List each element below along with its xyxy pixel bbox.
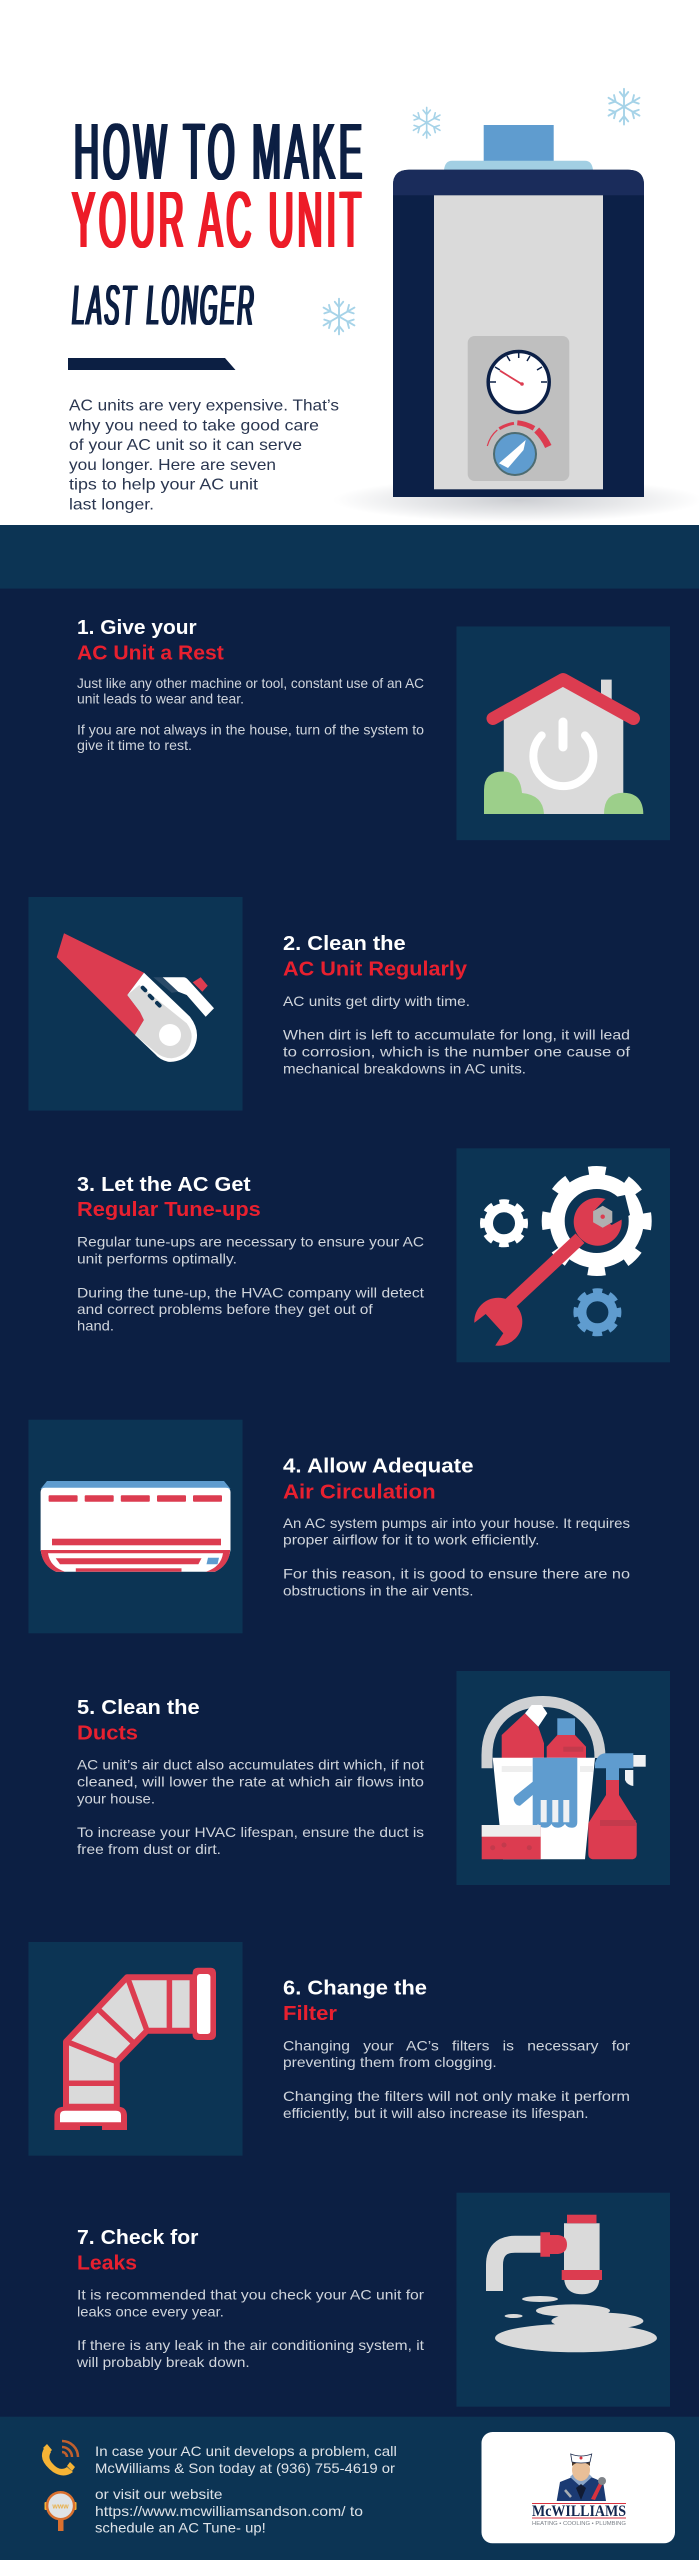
body: tip 7: It is recommended that you check your AC unit for [77,2286,424,2302]
intro paragraph: tips to help your AC unit [69,476,259,494]
icon panel: leaking pipe [456,2193,670,2407]
body: tip 6: Changing your AC’s filters is necessary for [283,2037,630,2053]
illustration: ac furnace unit [333,125,699,522]
heading: tip 3: Regular Tune-ups [77,1199,261,1221]
text: website message: schedule an AC Tune- up! [95,2520,266,2536]
panel: tip 3 text [77,1174,424,1334]
intro paragraph: why you need to take good care [68,417,319,434]
top band [0,525,699,589]
body: tip 6: Changing the filters will not only make it perform [283,2088,630,2104]
icon: phone [42,2441,78,2476]
logo card [482,2432,675,2543]
panel: tip 7 text [76,2227,424,2370]
heading: tip 7 [77,2227,199,2274]
icon: website magnifier [44,2492,76,2531]
heading: tip 4 [283,1456,474,1503]
body: tip 7: will probably break down. [76,2354,250,2370]
intro paragraph: of your AC unit so it can serve [69,437,302,454]
heading: tip 2: AC Unit Regularly [283,958,468,980]
heading: tip 4: 4. Allow Adequate [283,1456,474,1478]
intro paragraph: last longer. [69,496,154,513]
icon panel: cleaning supplies [456,1671,670,1885]
heading: tip 4: Air Circulation [283,1481,436,1503]
body: tip 3: and correct problems before they get out of [77,1301,373,1317]
body: tip 2: to corrosion, which is the number one cause of [283,1044,630,1060]
body: tip 6: efficiently, but it will also increase its lifespan. [283,2105,588,2121]
body: tip 5: free from dust or dirt. [77,1841,221,1857]
body: tip 1: Just like any other machine or tool, constant use of an AC [77,675,424,691]
icon panel: duct elbow [28,1942,242,2156]
icon: snowflake right [609,89,639,125]
logo wordmark [532,2503,626,2527]
body: tip 3: During the tune-up, the HVAC company will detect [77,1284,424,1300]
body: tip 1: unit leads to wear and tear. [77,691,244,707]
intro paragraph: AC units are very expensive. That’s [69,398,339,414]
text: website message: https://www.mcwilliamsandson.com/ to [95,2503,363,2519]
heading: tip 3: 3. Let the AC Get [77,1174,251,1196]
body: tip 5: AC unit’s air duct also accumulates dirt which, if not [77,1757,424,1773]
body: tip 3 [77,1234,424,1334]
body: tip 1 [77,675,424,753]
heading: tip 2: 2. Clean the [283,933,406,955]
body: tip 5: your house. [77,1790,155,1806]
text: call message [95,2443,397,2476]
heading: tip 6: 6. Change the [283,1977,427,1999]
logo wordmark: HEATING • COOLING • PLUMBING [532,2521,626,2527]
panel: tip 2 text [283,933,630,1076]
body: tip 4: An AC system pumps air into your house. It requires [283,1515,630,1531]
body: tip 6 [283,2037,630,2121]
heading: tip 6 [283,1977,427,2025]
body: tip 6: preventing them from clogging. [283,2054,497,2070]
heading: tip 1: AC Unit a Rest [77,642,224,664]
logo mascot [557,2454,606,2501]
text: website message: or visit our website [95,2486,223,2502]
icon: snowflake middle [324,299,354,334]
body: tip 5: cleaned, will lower the rate at which air flows into [77,1774,424,1790]
heading: tip 5: Ducts [77,1722,138,1744]
heading: tip 5: 5. Clean the [77,1697,200,1719]
heading: tip 7: 7. Check for [77,2227,199,2249]
icon: website magnifier: www [51,2504,69,2510]
text: call message: McWilliams & Son today at (936) 755-4619 or [95,2460,395,2476]
body: tip 5 [77,1757,424,1857]
header panel [0,0,699,525]
heading: tip 1 [77,617,224,664]
body: tip 2: mechanical breakdowns in AC units. [283,1060,526,1076]
panel: tip 4 text [283,1456,630,1598]
body: tip 4: proper airflow for it to work efficiently. [283,1532,540,1548]
header panel: LAST LONGER [72,274,256,338]
icon panel: gears and wrench [456,1148,670,1362]
body: tip 4: For this reason, it is good to ensure there are no [283,1566,630,1582]
icon panel: house with power symbol [456,626,670,840]
icon panel: hand vacuum [28,897,242,1111]
body: tip 3: hand. [77,1318,114,1334]
footer [0,2417,699,2560]
body: tip 3: Regular tune-ups are necessary to ensure your AC [77,1234,424,1250]
icon panel: wall ac unit [28,1420,242,1633]
intro paragraph: you longer. Here are seven [69,457,276,474]
body: tip 2: AC units get dirty with time. [283,993,470,1009]
body: tip 7: leaks once every year. [77,2303,224,2319]
body: tip 4: obstructions in the air vents. [283,1582,474,1598]
heading: tip 1: 1. Give your [77,617,197,639]
body: tip 7 [76,2286,424,2370]
title underline bar [68,358,236,370]
panel: tip 5 text [77,1697,424,1857]
body: tip 5: To increase your HVAC lifespan, ensure the duct is [77,1824,424,1840]
body: tip 1: If you are not always in the house, turn of the system to [77,722,424,738]
text: website message [95,2486,363,2536]
panel: tip 6 text [283,1977,630,2121]
heading: tip 7: Leaks [77,2252,137,2274]
intro paragraph [68,398,339,513]
body: tip 2 [283,993,630,1076]
logo wordmark: McWILLIAMS [532,2503,626,2520]
heading: tip 6: Filter [283,2003,337,2025]
text: call message: In case your AC unit develops a problem, call [95,2443,397,2459]
body: tip 4 [283,1515,630,1598]
body: tip 2: When dirt is left to accumulate for long, it will lead [283,1027,630,1043]
body: tip 1: give it time to rest. [77,737,192,753]
body: tip 7: If there is any leak in the air conditioning system, it [77,2337,424,2353]
heading: tip 5 [77,1697,200,1744]
heading: tip 3 [77,1174,261,1221]
panel: tip 1 text [77,617,424,753]
heading: tip 2 [283,933,468,980]
body: tip 3: unit performs optimally. [77,1250,237,1266]
icon: snowflake left [413,107,440,138]
